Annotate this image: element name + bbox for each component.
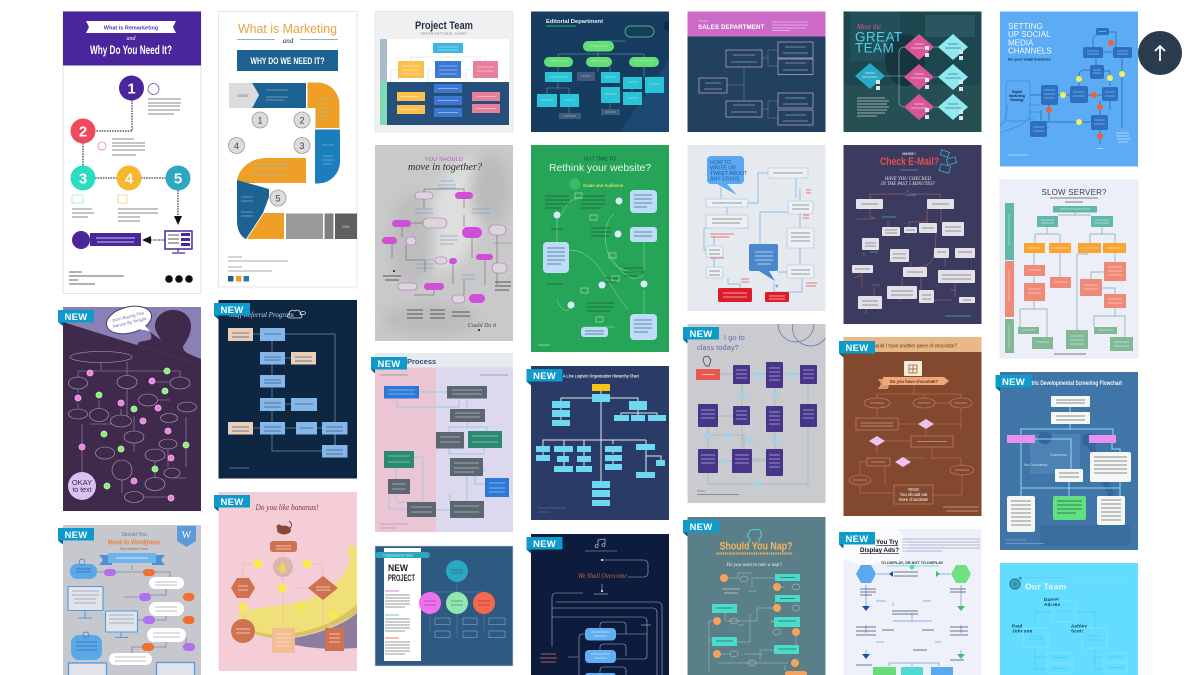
answer text: more chocolate! <box>899 497 928 502</box>
card: Project Team <box>375 12 513 132</box>
decision pills <box>104 569 195 651</box>
team names: Adams <box>1044 602 1061 607</box>
blue boxes <box>384 386 509 497</box>
card: Pediatric Developmental Screening Flowchart: Concerns <box>1050 452 1067 457</box>
red start box <box>696 369 720 380</box>
heading: SETTING <box>1008 22 1043 31</box>
numbered circles: 5 <box>275 194 281 204</box>
numbered circles <box>228 112 310 206</box>
heading: Editorial Department <box>546 19 603 25</box>
heading: CHANNELS <box>1008 46 1052 56</box>
NEW ribbon <box>839 532 875 548</box>
card: Pediatric Developmental Screening Flowchart: No Concerns <box>1024 462 1047 467</box>
card: Text flowchart <box>63 302 201 511</box>
heading <box>1042 188 1107 202</box>
cyan hierarchy boxes <box>536 394 666 506</box>
yellow markers <box>238 560 338 620</box>
heading: Why do we need it <box>237 50 338 71</box>
NEW ribbon <box>683 327 719 344</box>
heading <box>408 157 482 173</box>
team names: Scott <box>1071 628 1084 634</box>
card: Sales Department <box>688 12 826 132</box>
NEW ribbon <box>683 520 719 536</box>
heading: TEAM <box>855 40 894 56</box>
NEW ribbon <box>371 357 407 374</box>
NEW ribbon: NEW <box>845 343 869 354</box>
filled decision pills <box>382 192 493 303</box>
purple decision boxes <box>698 362 817 476</box>
card: We Shall Overcome <box>531 534 669 675</box>
question shapes <box>231 541 344 651</box>
NEW ribbon <box>526 369 562 386</box>
NEW ribbon: NEW <box>220 305 244 316</box>
NEW ribbon <box>58 310 94 326</box>
icon: pointer <box>703 356 711 366</box>
snake flow path: END <box>342 225 350 229</box>
icon: music note <box>595 539 605 548</box>
OKAY to text circle: OKAY <box>72 478 92 487</box>
speech bubble <box>104 302 154 338</box>
NEW ribbon <box>58 528 94 544</box>
heading: MAYBE I <box>902 152 916 156</box>
heading <box>880 152 939 170</box>
card: How to write or tweet about any crisis <box>688 145 826 311</box>
heading: You Try <box>876 539 899 546</box>
heading: What is Marketing: What is Marketing <box>238 22 337 36</box>
question boxes <box>109 577 186 665</box>
silhouette head <box>137 310 201 365</box>
decorative circles <box>778 324 826 346</box>
heading: Our Team <box>1025 582 1067 592</box>
speech bubble: crisis <box>749 244 778 281</box>
yellow markers <box>1060 71 1125 125</box>
blue process boxes <box>260 328 348 458</box>
card: Setting up social media channels: Strategy <box>1010 98 1024 102</box>
pink result boxes <box>1007 435 1116 443</box>
heading: Project Team <box>415 20 473 32</box>
yes and no markers <box>554 198 648 308</box>
banana photo circle <box>273 557 293 577</box>
green boxes <box>1018 327 1133 351</box>
card: Do you like bananas <box>218 492 357 671</box>
icon: Wordpress badge: W <box>182 530 192 541</box>
heading: Why Do You Need It: Why Do You Need It? <box>90 45 172 57</box>
heading: Move to Wordpress <box>108 538 160 546</box>
speech bubble: How to write <box>707 156 748 195</box>
card: You should move in together <box>375 145 513 341</box>
chocolate icon <box>904 361 922 376</box>
heading: move in together? <box>408 162 482 173</box>
card: Should You Move to Wordpress <box>63 525 201 675</box>
icon: Wordpress badge <box>177 526 196 547</box>
heading: Staff Referral Program <box>229 311 294 319</box>
heading: A Line Logistic Organization Hierarchy Chart <box>563 374 639 378</box>
step circles 1 to 5: 5 <box>174 170 182 188</box>
heading: We Shall Overcome <box>578 572 627 580</box>
red markers <box>1046 40 1114 139</box>
outlined decision pills <box>398 192 507 303</box>
heading: GREAT <box>855 30 903 44</box>
purple call to action bar <box>72 231 141 249</box>
card: Check E-Mail <box>844 145 982 324</box>
icon: envelopes <box>939 150 957 173</box>
subtitle ribbon: Organizational Chart <box>383 554 413 558</box>
numbered circles: 2 <box>299 116 305 126</box>
yellow top role <box>592 384 610 391</box>
outlined decision ellipses <box>68 352 196 502</box>
card: Should You Nap <box>688 517 826 675</box>
gray question boxes <box>852 199 975 309</box>
NEW ribbon <box>526 537 562 554</box>
NEW ribbon: NEW <box>533 539 556 550</box>
answer text: You should eat <box>900 492 928 497</box>
step circles 1 to 5 <box>70 76 190 190</box>
OKAY to text circle: to text <box>72 487 92 494</box>
heading: I go to <box>724 333 745 342</box>
text panel <box>384 548 421 661</box>
orange boxes <box>1024 243 1126 253</box>
NEW ribbon: NEW <box>1002 377 1025 388</box>
outlined org boxes <box>699 42 813 125</box>
icon: monkey <box>276 521 292 534</box>
team names: Paul <box>1012 624 1023 628</box>
heading: Rethink your website? <box>549 162 651 174</box>
social icons <box>228 276 249 282</box>
heading <box>1008 22 1052 62</box>
role circles <box>419 560 495 614</box>
heading: Should You <box>121 532 147 538</box>
OKAY to text circle <box>68 472 96 500</box>
NEW ribbon: NEW <box>533 371 556 382</box>
NEW ribbon: NEW <box>64 530 88 541</box>
outlined ellipses <box>849 398 974 504</box>
card: Setting up social media channels: Digital <box>1012 90 1022 94</box>
answer text <box>899 487 928 502</box>
card: Staff Referral Program <box>218 300 357 478</box>
speech bubble: How to write: TWEET ABOUT <box>710 171 748 177</box>
question: IN THE PAST 5 MINUTES? <box>880 182 936 187</box>
heading: Still Hesitant Now <box>120 547 148 551</box>
numbered circles: 3 <box>299 141 305 151</box>
heading <box>108 532 160 551</box>
org chart boxes <box>397 43 500 117</box>
card: Should You Try Display Ads <box>844 529 982 675</box>
heading: SLOW SERVER? <box>1042 188 1107 197</box>
NEW ribbon <box>214 303 250 320</box>
card: What is Marketing: and <box>283 37 294 45</box>
step circles 1 to 5: 2 <box>79 124 87 140</box>
NEW ribbon: NEW <box>845 534 869 545</box>
heading: IS IT TIME TO <box>584 156 616 162</box>
card: Setting up social media channels: Marketing <box>1009 94 1025 98</box>
gray process boxes <box>388 386 487 518</box>
blue step boxes <box>1030 28 1132 137</box>
heading: YOU SHOULD <box>425 157 463 163</box>
team names: Ashley <box>1071 624 1088 628</box>
heading: MEDIA <box>1008 38 1034 48</box>
heading: Pediatric Developmental Screening Flowchart <box>1019 381 1122 387</box>
heading: Should I have another piece of chocolate? <box>870 344 957 350</box>
signature: Could Do it <box>468 323 496 329</box>
heading <box>855 23 903 56</box>
card: New Project <box>375 546 513 666</box>
heading: class today? <box>697 343 739 352</box>
NEW ribbon <box>214 495 250 512</box>
card: What is Marketing <box>218 12 357 287</box>
team names: Johnson <box>1012 628 1033 634</box>
title ribbon: Do you have chocolate? <box>890 379 939 384</box>
card: Meet the Great Team <box>844 12 982 132</box>
peach note boxes <box>228 328 316 434</box>
card: Logistic Organization Hierarchy Chart <box>531 366 669 520</box>
subheading: TO DISPLAY, OR NOT TO DISPLAY <box>881 561 944 565</box>
looping arrows <box>552 560 662 675</box>
step circles 1 to 5: 4 <box>125 170 134 188</box>
text panel: PROJECT <box>388 573 415 584</box>
green role pills <box>544 41 659 67</box>
icon: hand and phone <box>1000 81 1040 133</box>
question: HAVE YOU CHECKED <box>884 177 932 182</box>
outlined question boxes <box>706 168 814 278</box>
step circles 1 to 5: 1 <box>127 80 136 98</box>
NEW ribbon: NEW <box>377 359 401 370</box>
card: Should I go to class today <box>688 324 826 503</box>
monitor panels <box>68 586 138 632</box>
question: Do you want to take a nap? <box>725 563 782 568</box>
subheading: Goals and Audience <box>583 183 624 188</box>
banana illustration <box>238 545 357 649</box>
category boxes <box>873 667 953 675</box>
NEW ribbon: NEW <box>689 329 713 340</box>
numbered circles: 1 <box>257 116 263 126</box>
step circles 1 to 5: 3 <box>79 170 87 188</box>
team diamonds <box>855 34 968 120</box>
banner <box>99 553 165 565</box>
answer text: YES!!! <box>908 487 919 492</box>
card: What is Remarketing <box>63 12 201 294</box>
speech bubble: How to write: WRITE OR <box>710 166 736 172</box>
green boxes <box>384 431 502 468</box>
card: Pediatric Developmental Screening Flowchart <box>1000 372 1138 550</box>
outlined team boxes <box>435 618 505 638</box>
title ribbon <box>878 377 949 389</box>
card: Setting up social media channels <box>1000 12 1138 166</box>
white text boxes <box>1007 396 1131 532</box>
orange yes markers <box>713 574 807 675</box>
heading <box>549 156 651 174</box>
card: Process flow <box>375 353 513 532</box>
team names <box>1012 597 1088 634</box>
heading: Meet the <box>856 23 881 31</box>
heading: Check E-Mail? <box>880 156 939 168</box>
speech bubble: How to write: HOW TO <box>710 160 731 166</box>
cyan role boxes <box>537 72 664 107</box>
light blue answer boxes <box>543 190 657 340</box>
NEW ribbon: NEW <box>220 497 244 508</box>
heading: Should You Nap? <box>720 540 793 552</box>
red stop buttons <box>718 288 789 302</box>
teal boxes <box>1037 206 1113 227</box>
heading: for your small business <box>1008 58 1051 62</box>
heading: UP SOCIAL <box>1008 30 1051 39</box>
text panel: NEW <box>388 563 408 574</box>
NEW ribbon: NEW <box>64 312 88 323</box>
heading: ORGANIZATIONAL CHART <box>421 32 467 36</box>
card: How to write or tweet about any crisis: ♥ <box>775 284 779 290</box>
card: Our Team <box>1000 563 1138 675</box>
icon: sheep <box>748 529 761 542</box>
heading: Process <box>407 357 436 366</box>
heading ribbon: What is Remarketing: What is Remarketing <box>104 26 158 32</box>
card: What is Remarketing: and <box>126 36 136 42</box>
speech bubble: How to write: ANY CRISIS <box>710 176 740 182</box>
question <box>880 177 936 187</box>
icon: cloud <box>288 310 306 318</box>
outlined team boxes <box>1023 601 1127 673</box>
card: Rethink your website <box>531 145 669 352</box>
speech bubble: Person By Tonight <box>113 316 147 329</box>
NEW ribbon: NEW <box>689 522 713 533</box>
yes and no tags <box>704 372 795 486</box>
scroll to top button <box>1138 31 1182 75</box>
blue lyric pills <box>585 628 616 675</box>
snake flow path: START <box>237 94 249 98</box>
NEW ribbon <box>996 375 1032 392</box>
icon: target circle <box>1009 577 1022 590</box>
heading <box>697 333 745 352</box>
numbered circles: 4 <box>234 141 239 151</box>
snake flow path <box>229 82 357 239</box>
team names: Daniel <box>1044 597 1059 602</box>
heading <box>415 20 473 36</box>
red boxes <box>1024 262 1126 308</box>
speech bubble: Don't Buying This <box>112 310 145 323</box>
pink diamonds <box>869 419 934 467</box>
card: Editorial Department <box>531 12 669 132</box>
heading <box>860 539 899 554</box>
social icons <box>165 275 193 283</box>
green guidance box <box>1053 496 1086 520</box>
section bars <box>1005 203 1014 353</box>
hexagons <box>856 565 971 583</box>
icon: monitor <box>165 231 192 253</box>
heading: SALES DEPARTMENT <box>698 24 765 31</box>
heading ribbon: What is Remarketing <box>86 21 176 33</box>
heading: Display Ads? <box>860 547 899 554</box>
card: Slow Server <box>1000 180 1138 358</box>
yes and no markers <box>75 368 189 501</box>
NEW ribbon <box>839 341 875 358</box>
heading: Do you like bananas! <box>255 502 319 512</box>
cyan question boxes <box>712 574 800 654</box>
heading: Why do we need it: WHY DO WE NEED IT? <box>250 56 325 67</box>
card: Chocolate flowchart <box>844 337 982 516</box>
